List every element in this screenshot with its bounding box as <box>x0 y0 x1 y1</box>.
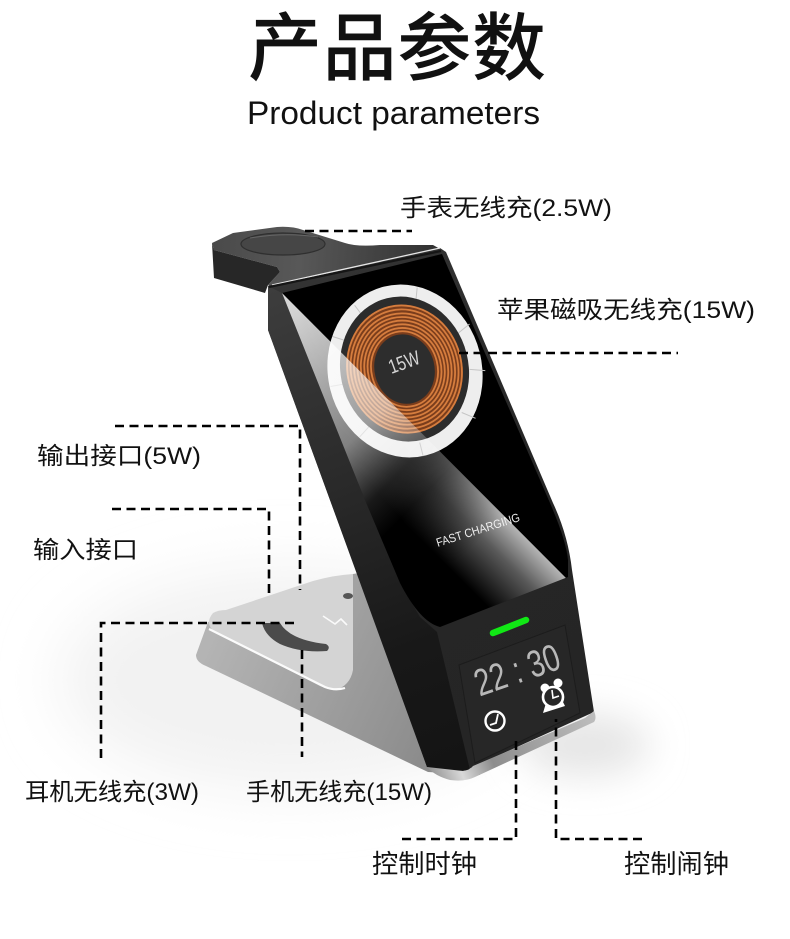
coil centre <box>374 334 435 404</box>
watch charger arm <box>212 227 442 293</box>
top plate <box>209 574 353 690</box>
label: phone charging: 手机无线充(15W) <box>246 779 432 806</box>
earphone pad marks <box>323 616 347 625</box>
base foot trim <box>427 711 596 781</box>
callout lines <box>101 231 678 839</box>
title: 产品参数 <box>248 7 546 90</box>
15W mark: 15W <box>386 347 423 379</box>
screen reflection <box>282 293 443 527</box>
label: magnetic charging: 苹果磁吸无线充(15W) <box>497 297 755 324</box>
stand side face <box>268 286 470 772</box>
label: input port: 输入接口 <box>33 537 138 564</box>
icon: alarm clock <box>540 678 565 713</box>
mirrored screen <box>282 254 568 627</box>
label: watch charging: 手表无线充(2.5W) <box>400 195 612 222</box>
product: wireless charging stand <box>196 227 596 781</box>
copper coil <box>346 304 463 434</box>
silver base <box>196 560 480 775</box>
label: earphone charging: 耳机无线充(3W) <box>25 779 199 806</box>
lcd panel <box>459 625 580 763</box>
clock time: 22 : 30 <box>469 637 566 705</box>
label: output port: 输出接口(5W) <box>37 443 201 470</box>
icon: clock <box>486 712 504 730</box>
stand body <box>268 248 594 771</box>
green led bar <box>493 620 526 633</box>
earphone charger slot <box>262 623 329 651</box>
label: alarm control: 控制闹钟 <box>624 849 729 879</box>
subtitle: Product parameters <box>247 95 540 131</box>
label: clock control: 控制时钟 <box>372 849 477 879</box>
watch puck <box>241 233 325 255</box>
fast charging mark: FAST CHARGING <box>434 510 522 550</box>
charging ring <box>327 284 486 458</box>
